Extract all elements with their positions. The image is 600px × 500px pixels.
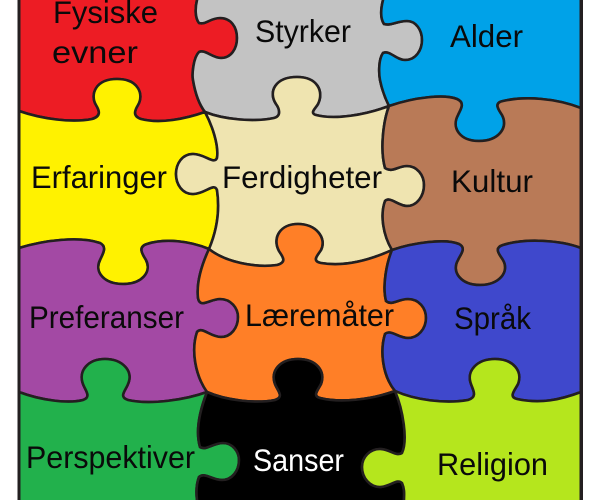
puzzle: lime piece, Religion: [362, 359, 581, 500]
label: Styrker: Styrker: [255, 13, 351, 49]
label: Religion: Religion: [437, 446, 548, 482]
puzzle: green piece, Perspektiver: [19, 359, 239, 500]
label: Erfaringer: Erfaringer: [31, 159, 167, 195]
label: Språk: Språk: [454, 300, 531, 336]
puzzle: black piece, Sanser: [196, 359, 405, 500]
puzzle: red piece, Fysiske evner: [19, 0, 237, 121]
puzzle: beige piece, Ferdigheter: [176, 77, 424, 266]
puzzle: brown piece, Kultur: [382, 97, 581, 285]
puzzle: yellow piece, Erfaringer: [19, 79, 218, 284]
label: Perspektiver: Perspektiver: [26, 439, 195, 475]
label: Kultur: Kultur: [451, 163, 533, 199]
label: Preferanser: Preferanser: [29, 299, 184, 335]
puzzle: indigo piece, Språk: [382, 241, 581, 402]
puzzle: blue piece, Alder: [379, 0, 581, 141]
label: Sanser: Sanser: [253, 442, 344, 478]
label: Fysiske evner: evner: [52, 34, 138, 70]
puzzle: purple piece, Preferanser: [19, 239, 238, 402]
puzzle: gray piece, Styrker: [193, 0, 422, 120]
label: Fysiske evner: [52, 0, 158, 70]
label: Alder: Alder: [450, 18, 523, 54]
label: Læremåter: Læremåter: [245, 297, 394, 333]
puzzle: orange piece, Læremåter: [194, 224, 426, 402]
label: Ferdigheter: Ferdigheter: [222, 159, 382, 195]
